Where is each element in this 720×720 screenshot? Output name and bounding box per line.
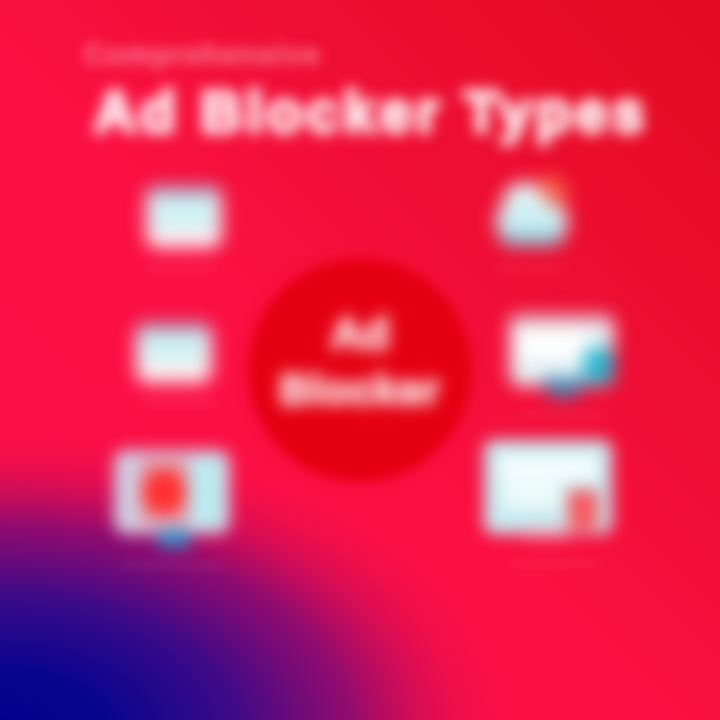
label: middle-left: [140, 398, 216, 404]
central circle: Ad Blocker: [248, 258, 472, 482]
icon: middle-left browser window: [121, 309, 227, 398]
icon: middle-right envelope window: [495, 300, 629, 412]
eyebrow heading: Comprehensive: [84, 39, 321, 71]
label: bottom-right: [510, 560, 600, 566]
circle label: Ad: [331, 309, 389, 358]
icon: bottom-left monitor with stop sign: [101, 437, 243, 560]
circle label: [268, 305, 450, 418]
label: top-right: [498, 266, 568, 272]
icon: top-left browser window: [131, 172, 237, 263]
label: bottom-left: [122, 562, 222, 568]
icon: bottom-right dashboard screen: [470, 426, 626, 550]
circle label: Blocker: [279, 366, 441, 413]
icon: top-right cloud: [482, 167, 582, 260]
title block: [78, 37, 654, 156]
label: middle-right: [520, 412, 604, 418]
main heading: Ad Blocker Types: [94, 80, 648, 145]
